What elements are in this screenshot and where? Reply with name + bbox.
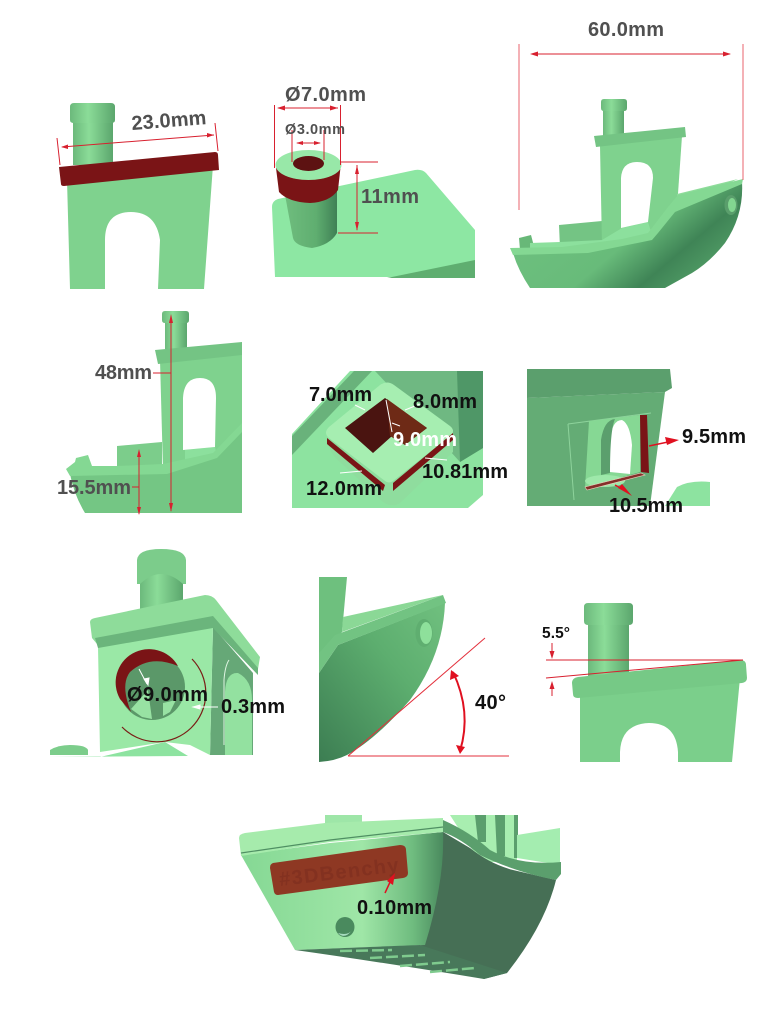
rear deck box <box>559 221 602 248</box>
inner arch shadow <box>601 419 615 475</box>
front cabin face <box>98 627 213 755</box>
funnel <box>73 120 113 165</box>
roof <box>594 127 686 147</box>
cabin dark side <box>457 371 483 462</box>
label: window diameter: Ø9.0mm <box>127 684 208 706</box>
deck <box>272 170 475 277</box>
cabin pillars and deck <box>325 815 560 865</box>
side groove <box>224 660 229 745</box>
red funnel cap band <box>276 163 341 203</box>
pointer arrows <box>139 669 218 709</box>
dark hull side <box>420 832 556 979</box>
label: height: 11mm <box>361 186 419 208</box>
panel: height 48mm and 15.5mm <box>57 311 242 515</box>
deck fitting <box>665 482 710 506</box>
arrows <box>615 437 679 496</box>
panel: funnel diameters and height <box>272 84 475 278</box>
funnel stem <box>140 574 183 612</box>
panel: rear box square opening <box>292 371 508 508</box>
top rim <box>239 818 443 856</box>
gunwale band <box>510 179 743 255</box>
panel: bow overhang 40° <box>319 577 509 762</box>
roof band <box>527 369 672 398</box>
cabin rear wall <box>527 392 665 506</box>
porthole <box>724 195 738 215</box>
panel: roof slope 5.5° <box>542 603 747 762</box>
label: 23.0mm <box>131 107 207 135</box>
dimension lines <box>274 105 378 233</box>
label: 9.0mm: 9.0mm <box>393 429 457 451</box>
deck shadow <box>387 260 475 278</box>
label: groove: 0.3mm <box>221 696 285 718</box>
funnel cap <box>601 99 627 111</box>
roof <box>90 595 260 669</box>
label: 7.0mm: 7.0mm <box>309 384 372 406</box>
deck visible through window <box>185 447 217 462</box>
embossed name: #3DBenchy <box>278 854 401 891</box>
label: outer diameter: Ø7.0mm <box>285 84 366 106</box>
door recess frame <box>568 413 651 500</box>
red door sill <box>585 473 645 490</box>
gunwale band <box>66 423 242 476</box>
roof <box>572 660 747 698</box>
label: 10.5mm: 10.5mm <box>609 495 683 517</box>
slope lines <box>546 660 743 678</box>
deck side ledge <box>292 371 372 455</box>
label: 12.0mm: 12.0mm <box>306 478 382 500</box>
red side faces <box>327 433 453 491</box>
panel: cabin door opening <box>527 369 746 517</box>
round window <box>116 649 185 720</box>
porthole <box>416 619 432 647</box>
groove arc <box>122 659 206 742</box>
lower base of box <box>327 430 453 505</box>
label: 60.0mm <box>588 19 664 41</box>
panel: round window and 0.3mm groove <box>48 549 285 757</box>
funnel cap <box>584 603 633 625</box>
bottom embossed text marks <box>340 950 475 972</box>
funnel stem <box>285 190 337 248</box>
panel: overall length 60.0mm <box>510 19 743 288</box>
label: 48mm: 48mm <box>95 362 152 384</box>
highlighted roof in dark red <box>59 152 219 186</box>
pointer arrow <box>385 873 395 893</box>
dimension lines <box>519 44 743 210</box>
label: 5.5° <box>542 625 570 642</box>
panel: roof width 23.0mm <box>57 103 219 289</box>
funnel top ring <box>276 150 342 180</box>
funnel <box>603 109 624 136</box>
stern bollard <box>519 235 535 250</box>
roof <box>155 342 242 364</box>
deck and disc <box>48 742 188 757</box>
panel: hull text depth 0.10mm <box>239 815 561 979</box>
label: 8.0mm: 8.0mm <box>413 391 477 413</box>
label: 40° <box>475 692 506 714</box>
boat cabin <box>67 165 213 289</box>
cabin <box>375 371 483 462</box>
window arch <box>610 420 632 474</box>
cabin <box>160 348 242 470</box>
front hull <box>241 832 443 950</box>
dimension lines <box>132 314 173 515</box>
hole <box>336 917 354 937</box>
dark rim <box>443 820 561 880</box>
window <box>183 378 216 450</box>
gunwale <box>319 595 446 673</box>
bow deck <box>677 179 738 207</box>
funnel cap <box>137 549 186 584</box>
rear deck box <box>117 442 162 470</box>
label: 15.5mm: 15.5mm <box>57 477 131 499</box>
red door side <box>640 415 649 473</box>
square opening <box>345 398 427 453</box>
dimension marks <box>340 400 447 473</box>
deck strip <box>530 222 652 250</box>
funnel cap <box>162 311 189 323</box>
cabin sliver <box>319 577 347 657</box>
dimension arrow <box>57 123 218 165</box>
label: 9.5mm: 9.5mm <box>682 426 746 448</box>
deck <box>342 595 443 632</box>
deck <box>292 371 483 508</box>
angle lines <box>348 638 509 756</box>
hull <box>70 430 242 513</box>
roof shadow <box>95 616 258 675</box>
seat disc <box>585 475 625 487</box>
funnel cap <box>70 103 115 123</box>
rim line <box>241 827 443 853</box>
label: bore diameter: Ø3.0mm <box>285 122 345 138</box>
window <box>621 162 653 228</box>
box top face <box>326 382 453 482</box>
hull <box>319 603 445 762</box>
hull bottom <box>295 945 507 979</box>
label: 10.81mm: 10.81mm <box>422 461 508 483</box>
label: 0.10mm <box>357 897 432 919</box>
red name plate <box>270 845 408 895</box>
cabin <box>580 678 740 762</box>
hull <box>513 182 742 288</box>
small arrows <box>550 643 554 696</box>
cabin <box>600 136 682 246</box>
funnel <box>588 622 629 678</box>
right cabin face <box>210 627 253 755</box>
funnel <box>165 321 187 349</box>
interior <box>585 415 640 488</box>
side arch <box>225 673 252 755</box>
angle arrow <box>450 670 465 754</box>
funnel bore <box>293 156 324 171</box>
